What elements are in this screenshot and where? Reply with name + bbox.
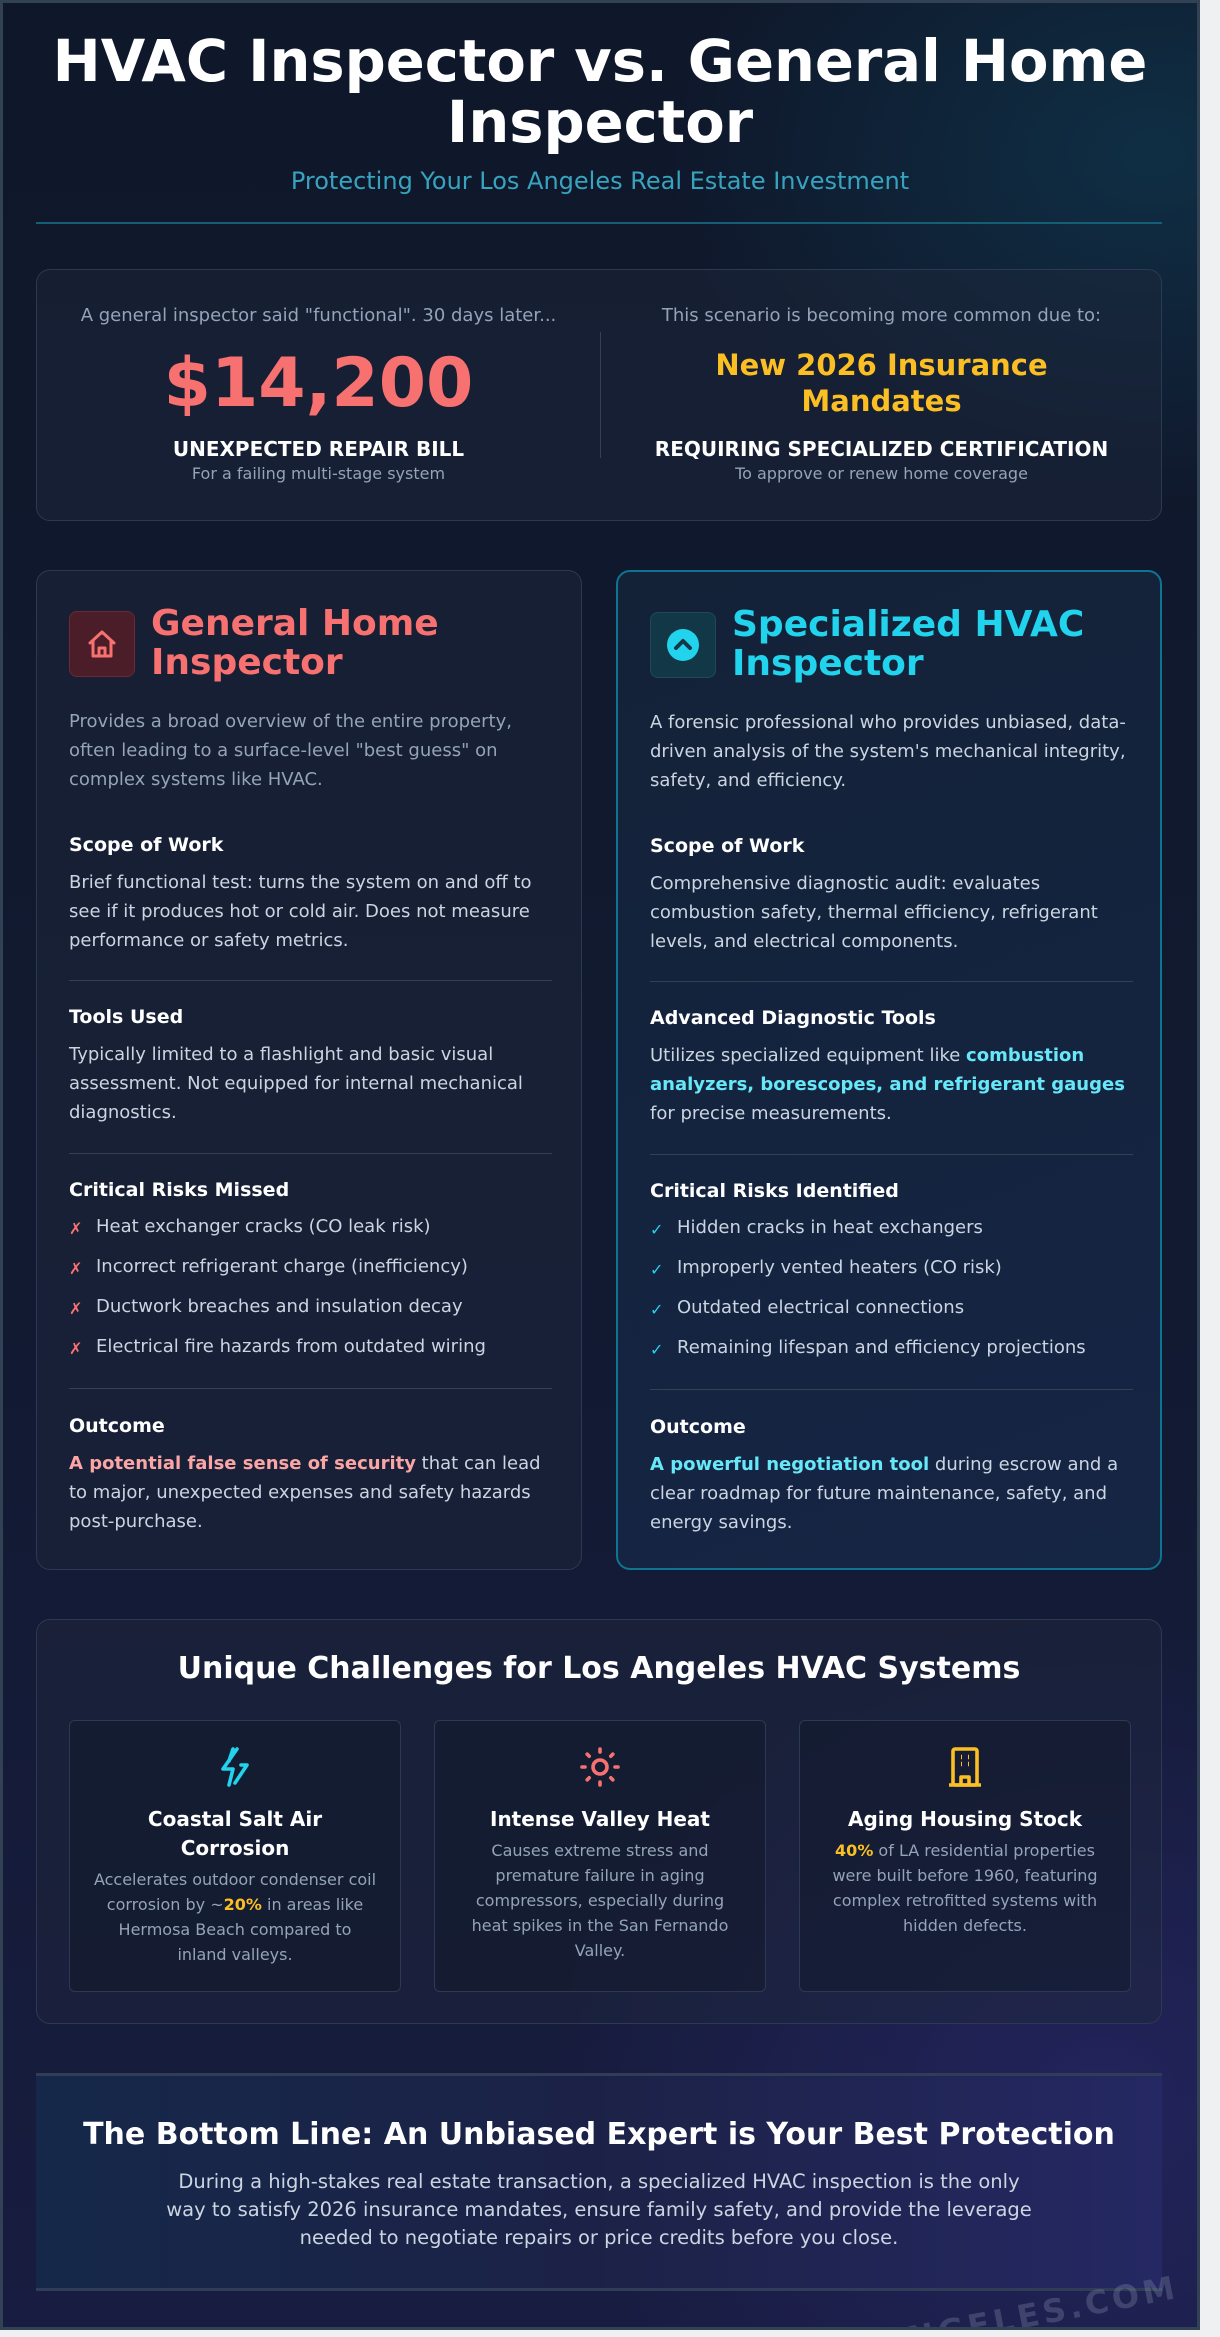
panel: general home inspector	[36, 570, 582, 1570]
section: risks missed: Critical Risks Missed	[69, 1179, 289, 1201]
card: valley heat: Intense Valley Heat	[490, 1807, 710, 1831]
card: valley heat: premature failure in aging	[495, 1866, 705, 1885]
section: risks missed: ✗	[69, 1219, 82, 1238]
section: tools: Typically limited to a flashlight and basic visual assessment. Not equipped for internal mechanical diagnostics.	[69, 1044, 523, 1123]
section: risks identified: ✓	[650, 1220, 663, 1239]
card: aging housing: complex retrofitted systems with	[833, 1891, 1097, 1910]
icon: building	[949, 1747, 981, 1787]
heading	[732, 604, 1084, 684]
section: risks identified: Critical Risks Identified	[650, 1180, 899, 1202]
text	[166, 2170, 1032, 2249]
card: aging housing: hidden defects.	[903, 1916, 1027, 1935]
section: risks identified: ✓	[650, 1340, 663, 1359]
heading: Inspector	[732, 643, 924, 684]
subtitle: Protecting Your Los Angeles Real Estate Investment	[291, 167, 909, 195]
text: way to satisfy 2026 insurance mandates, ensure family safety, and provide the leverage	[166, 2198, 1032, 2221]
card: valley heat: Causes extreme stress and	[491, 1841, 709, 1860]
stat: repair bill: A general inspector said "functional". 30 days later...	[81, 305, 556, 326]
card: valley heat	[434, 1720, 766, 1992]
icon: house	[69, 611, 135, 677]
section: risks identified: Improperly vented heaters (CO risk)	[677, 1257, 1002, 1278]
stat: insurance mandates: New 2026 Insurance	[715, 348, 1048, 382]
card: valley heat: Valley.	[575, 1941, 625, 1960]
text: description: Provides a broad overview of the entire property, often leading to a surface-level "best guess" on complex systems like HVAC.	[69, 711, 512, 790]
card: salt air: corrosion by ~20% in areas like	[107, 1895, 363, 1914]
section: risks identified: ✓	[650, 1260, 663, 1279]
title	[53, 28, 1147, 156]
section: risks identified: Remaining lifespan and efficiency projections	[677, 1337, 1086, 1358]
section: risks missed: Ductwork breaches and insulation decay	[96, 1296, 463, 1317]
section: outcome: Outcome	[650, 1416, 746, 1438]
icon: bolt	[221, 1747, 249, 1787]
section: risks identified	[650, 1180, 1086, 1359]
heading: Unique Challenges for Los Angeles HVAC Systems	[178, 1651, 1020, 1686]
section: scope: Comprehensive diagnostic audit: evaluates combustion safety, thermal efficiency, refrigerant levels, and electrical components.	[650, 873, 1098, 952]
section: outcome	[69, 1415, 541, 1532]
stat: insurance mandates: REQUIRING SPECIALIZED CERTIFICATION	[655, 437, 1108, 461]
card: valley heat: compressors, especially during	[476, 1891, 724, 1910]
text: During a high-stakes real estate transaction, a specialized HVAC inspection is the only	[178, 2170, 1020, 2193]
text: needed to negotiate repairs or price credits before you close.	[300, 2226, 898, 2249]
section: risks missed: ✗	[69, 1299, 82, 1318]
section: tools: Utilizes specialized equipment like combustion analyzers, borescopes, and refrigerant gauges for precise measurements.	[650, 1045, 1125, 1124]
icon: sun	[580, 1747, 620, 1787]
stat: insurance mandates	[655, 305, 1108, 483]
section: risks missed: Electrical fire hazards from outdated wiring	[96, 1336, 486, 1357]
card: salt air: Coastal Salt Air	[148, 1807, 322, 1831]
section: tools	[650, 1007, 1125, 1124]
section: risks missed: Heat exchanger cracks (CO leak risk)	[96, 1216, 431, 1237]
heading: General Home	[151, 603, 439, 644]
section: risks missed	[69, 1179, 486, 1358]
stat: repair bill: UNEXPECTED REPAIR BILL	[173, 437, 464, 461]
card: aging housing: 40% of LA residential properties	[835, 1841, 1095, 1860]
panel: specialized hvac inspector	[616, 570, 1162, 1570]
icon: hvac	[650, 612, 716, 678]
section: outcome	[650, 1416, 1118, 1533]
section: tools: Advanced Diagnostic Tools	[650, 1007, 936, 1029]
text: description: A forensic professional who provides unbiased, data-driven analysis of the system's mechanical integrity, safety, and efficiency.	[650, 712, 1126, 791]
section: outcome: A powerful negotiation tool during escrow and a clear roadmap for future maintenance, safety, and energy savings.	[650, 1454, 1118, 1533]
stat: repair bill: For a failing multi-stage system	[192, 464, 445, 483]
stat: repair bill	[81, 305, 556, 483]
section: scope	[69, 834, 532, 951]
heading: Inspector	[151, 642, 343, 683]
stat: insurance mandates: To approve or renew home coverage	[735, 464, 1028, 483]
card: aging housing	[799, 1720, 1131, 1992]
title: HVAC Inspector vs. General Home	[53, 28, 1147, 95]
card: salt air: Corrosion	[181, 1836, 289, 1860]
stat: insurance mandates: This scenario is becoming more common due to:	[662, 305, 1101, 326]
section: tools: Tools Used	[69, 1006, 183, 1028]
panel: stat banner	[36, 269, 1162, 521]
section: outcome: Outcome	[69, 1415, 165, 1437]
card: salt air: Hermosa Beach compared to	[119, 1920, 351, 1939]
section: risks identified: ✓	[650, 1300, 663, 1319]
heading: Specialized HVAC	[732, 604, 1084, 645]
section: scope: Brief functional test: turns the system on and off to see if it produces hot or cold air. Does not measure performance or safety metrics.	[69, 872, 532, 951]
section: scope: Scope of Work	[650, 835, 804, 857]
section: tools	[68, 1006, 523, 1123]
card: aging housing: were built before 1960, featuring	[832, 1866, 1098, 1885]
title: Inspector	[447, 89, 753, 156]
section: risks identified: Hidden cracks in heat exchangers	[677, 1217, 983, 1238]
stat: insurance mandates: Mandates	[801, 384, 962, 418]
section: risks missed: ✗	[69, 1339, 82, 1358]
section: risks missed: Incorrect refrigerant charge (inefficiency)	[96, 1256, 468, 1277]
heading: The Bottom Line: An Unbiased Expert is Your Best Protection	[83, 2117, 1115, 2152]
card: aging housing: Aging Housing Stock	[848, 1807, 1082, 1831]
panel: bottom line	[36, 2073, 1162, 2291]
stat: repair bill: $14,200	[164, 344, 473, 423]
card: salt air	[69, 1720, 401, 1992]
heading	[151, 603, 439, 683]
section: scope: Scope of Work	[69, 834, 223, 856]
card: salt air: inland valleys.	[177, 1945, 293, 1964]
section: outcome: A potential false sense of security that can lead to major, unexpected expenses and safety hazards post-purchase.	[69, 1453, 541, 1532]
section: scope	[650, 835, 1098, 952]
card: valley heat: heat spikes in the San Fernando	[472, 1916, 728, 1935]
section: risks identified: Outdated electrical connections	[677, 1297, 964, 1318]
card: salt air: Accelerates outdoor condenser coil	[94, 1870, 376, 1889]
panel: LA challenges	[36, 1619, 1162, 2024]
section: risks missed: ✗	[69, 1259, 82, 1278]
